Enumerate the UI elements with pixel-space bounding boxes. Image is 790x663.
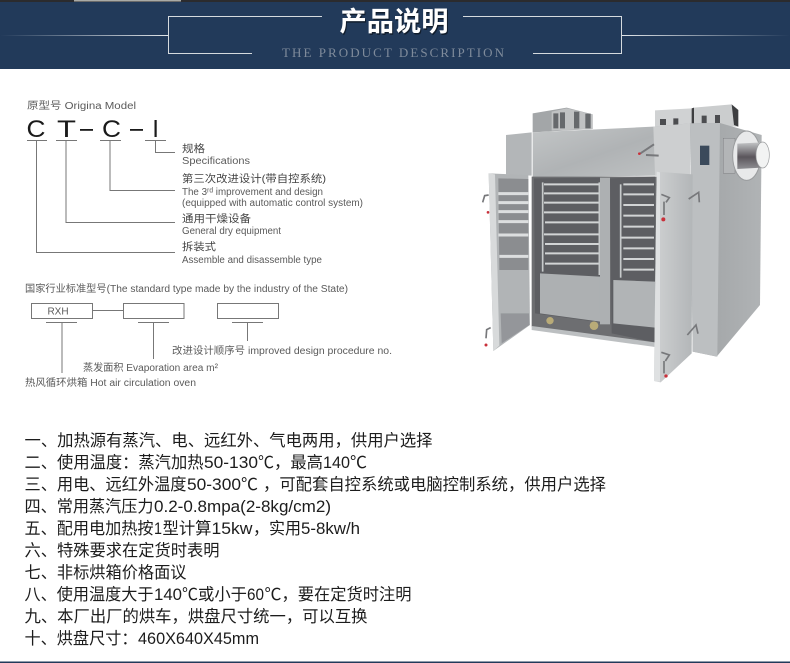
item 2: 140	[323, 454, 350, 472]
item 4: 四、常用蒸汽压力	[24, 498, 154, 516]
item 7: 七、非标烘箱价格面议	[24, 564, 186, 582]
label: hot air oven: 热风循环烘箱 Hot air circulation oven	[25, 376, 196, 389]
item 3: ℃	[241, 476, 258, 494]
label: specifications: 规格	[182, 142, 206, 155]
item 8: 八、使用温度大于	[24, 586, 154, 604]
control panel	[700, 146, 709, 165]
item 10	[24, 629, 259, 648]
RXH code: RXH	[47, 306, 69, 318]
item 8	[24, 586, 412, 604]
label: third improvement: The 3ʳᵈ improvement and design	[182, 187, 323, 198]
model number diagram: original model	[26, 99, 363, 266]
right tray bay	[610, 177, 655, 342]
box leader lines	[46, 322, 263, 373]
item 5: 五、配用电加热按	[24, 520, 154, 538]
model code letters: T	[57, 116, 76, 143]
model heading: 原型号 Origina Model	[27, 99, 136, 112]
item 3: 三、用电、远红外温度	[24, 476, 186, 494]
title shadow: 产品说明	[340, 8, 450, 38]
item 2: 二、使用温度：蒸汽加热	[24, 454, 204, 472]
bottom rule	[0, 662, 790, 663]
label: specifications: Specifications	[182, 156, 250, 167]
leader lines	[27, 140, 175, 252]
item 8: 或小于	[198, 586, 247, 604]
feature list	[24, 432, 606, 648]
item 4	[24, 498, 331, 516]
code boxes	[32, 304, 278, 318]
label: third improvement: (equipped with automatic control system)	[182, 198, 363, 209]
item 3	[24, 476, 606, 494]
title: 产品说明	[340, 7, 448, 37]
label: assemble type: Assemble and disassemble type	[182, 255, 322, 266]
item 2: 50-130	[204, 454, 258, 472]
base rail	[532, 326, 655, 347]
item 5: ，实用	[253, 520, 301, 538]
item 8: 140	[154, 586, 182, 604]
label: third improvement: 第三次改进设计(带自控系统)	[182, 172, 326, 185]
item 2: ℃	[350, 454, 367, 472]
item 2: ℃	[258, 454, 274, 472]
drying oven illustration	[483, 104, 769, 382]
item 2: ，最高	[274, 454, 323, 472]
item 2	[24, 454, 367, 472]
center latch handle	[638, 144, 659, 156]
item 5: 15kw	[212, 520, 253, 538]
model code letters	[26, 116, 157, 143]
item 8: ℃	[182, 586, 198, 604]
item 10: 十、烘盘尺寸：	[24, 629, 138, 648]
rooftop units	[533, 104, 738, 132]
label: third improvement	[182, 172, 363, 209]
header frame lines	[0, 16, 790, 54]
label: general dry equipment	[182, 212, 281, 237]
left tray bay	[534, 178, 600, 330]
right open door	[654, 172, 699, 382]
label: general dry equipment: General dry equipment	[182, 226, 281, 237]
label: assemble type: 拆装式	[182, 240, 217, 253]
item 5: 型计算	[162, 519, 212, 538]
ventilation fan	[723, 131, 769, 180]
item 1: 一、加热源有蒸汽、电、远红外、气电两用，供用户选择	[24, 432, 432, 450]
label: design procedure: 改进设计顺序号 improved design procedure no.	[172, 344, 392, 357]
left open door	[483, 173, 530, 351]
subtitle: THE PRODUCT DESCRIPTION	[282, 45, 505, 60]
center post	[600, 178, 610, 324]
item 5: 1	[154, 520, 162, 538]
model code letters: C	[26, 116, 46, 143]
item 5: 5-8kw/h	[301, 520, 360, 538]
item 5	[24, 519, 360, 538]
cabinet body	[506, 123, 762, 357]
item 9: 九、本厂出厂的烘车，烘盘尺寸统一，可以互换	[24, 607, 367, 626]
item 8: ，要在定货时注明	[282, 586, 412, 604]
item 4: 0.2-0.8mpa(2-8kg/cm2)	[154, 498, 331, 516]
item 8: 60	[247, 586, 264, 604]
item 8: ℃	[264, 586, 282, 604]
label: assemble type	[182, 240, 322, 266]
label: general dry equipment: 通用干燥设备	[182, 212, 252, 225]
item 10: 460X640X45mm	[138, 630, 259, 648]
label: evaporation area: 蒸发面积 Evaporation area m²	[83, 361, 219, 374]
item 3: 50-300	[187, 476, 241, 494]
header band	[0, 0, 790, 69]
model code letters: C	[102, 116, 121, 143]
standard heading: 国家行业标准型号(The standard type made by the industry of the State)	[25, 282, 348, 295]
state standard model diagram	[25, 282, 392, 389]
label: specifications	[182, 142, 250, 167]
item 6: 六、特殊要求在定货时表明	[24, 542, 220, 560]
item 3: ，可配套自控系统或电脑控制系统，供用户选择	[263, 476, 606, 494]
